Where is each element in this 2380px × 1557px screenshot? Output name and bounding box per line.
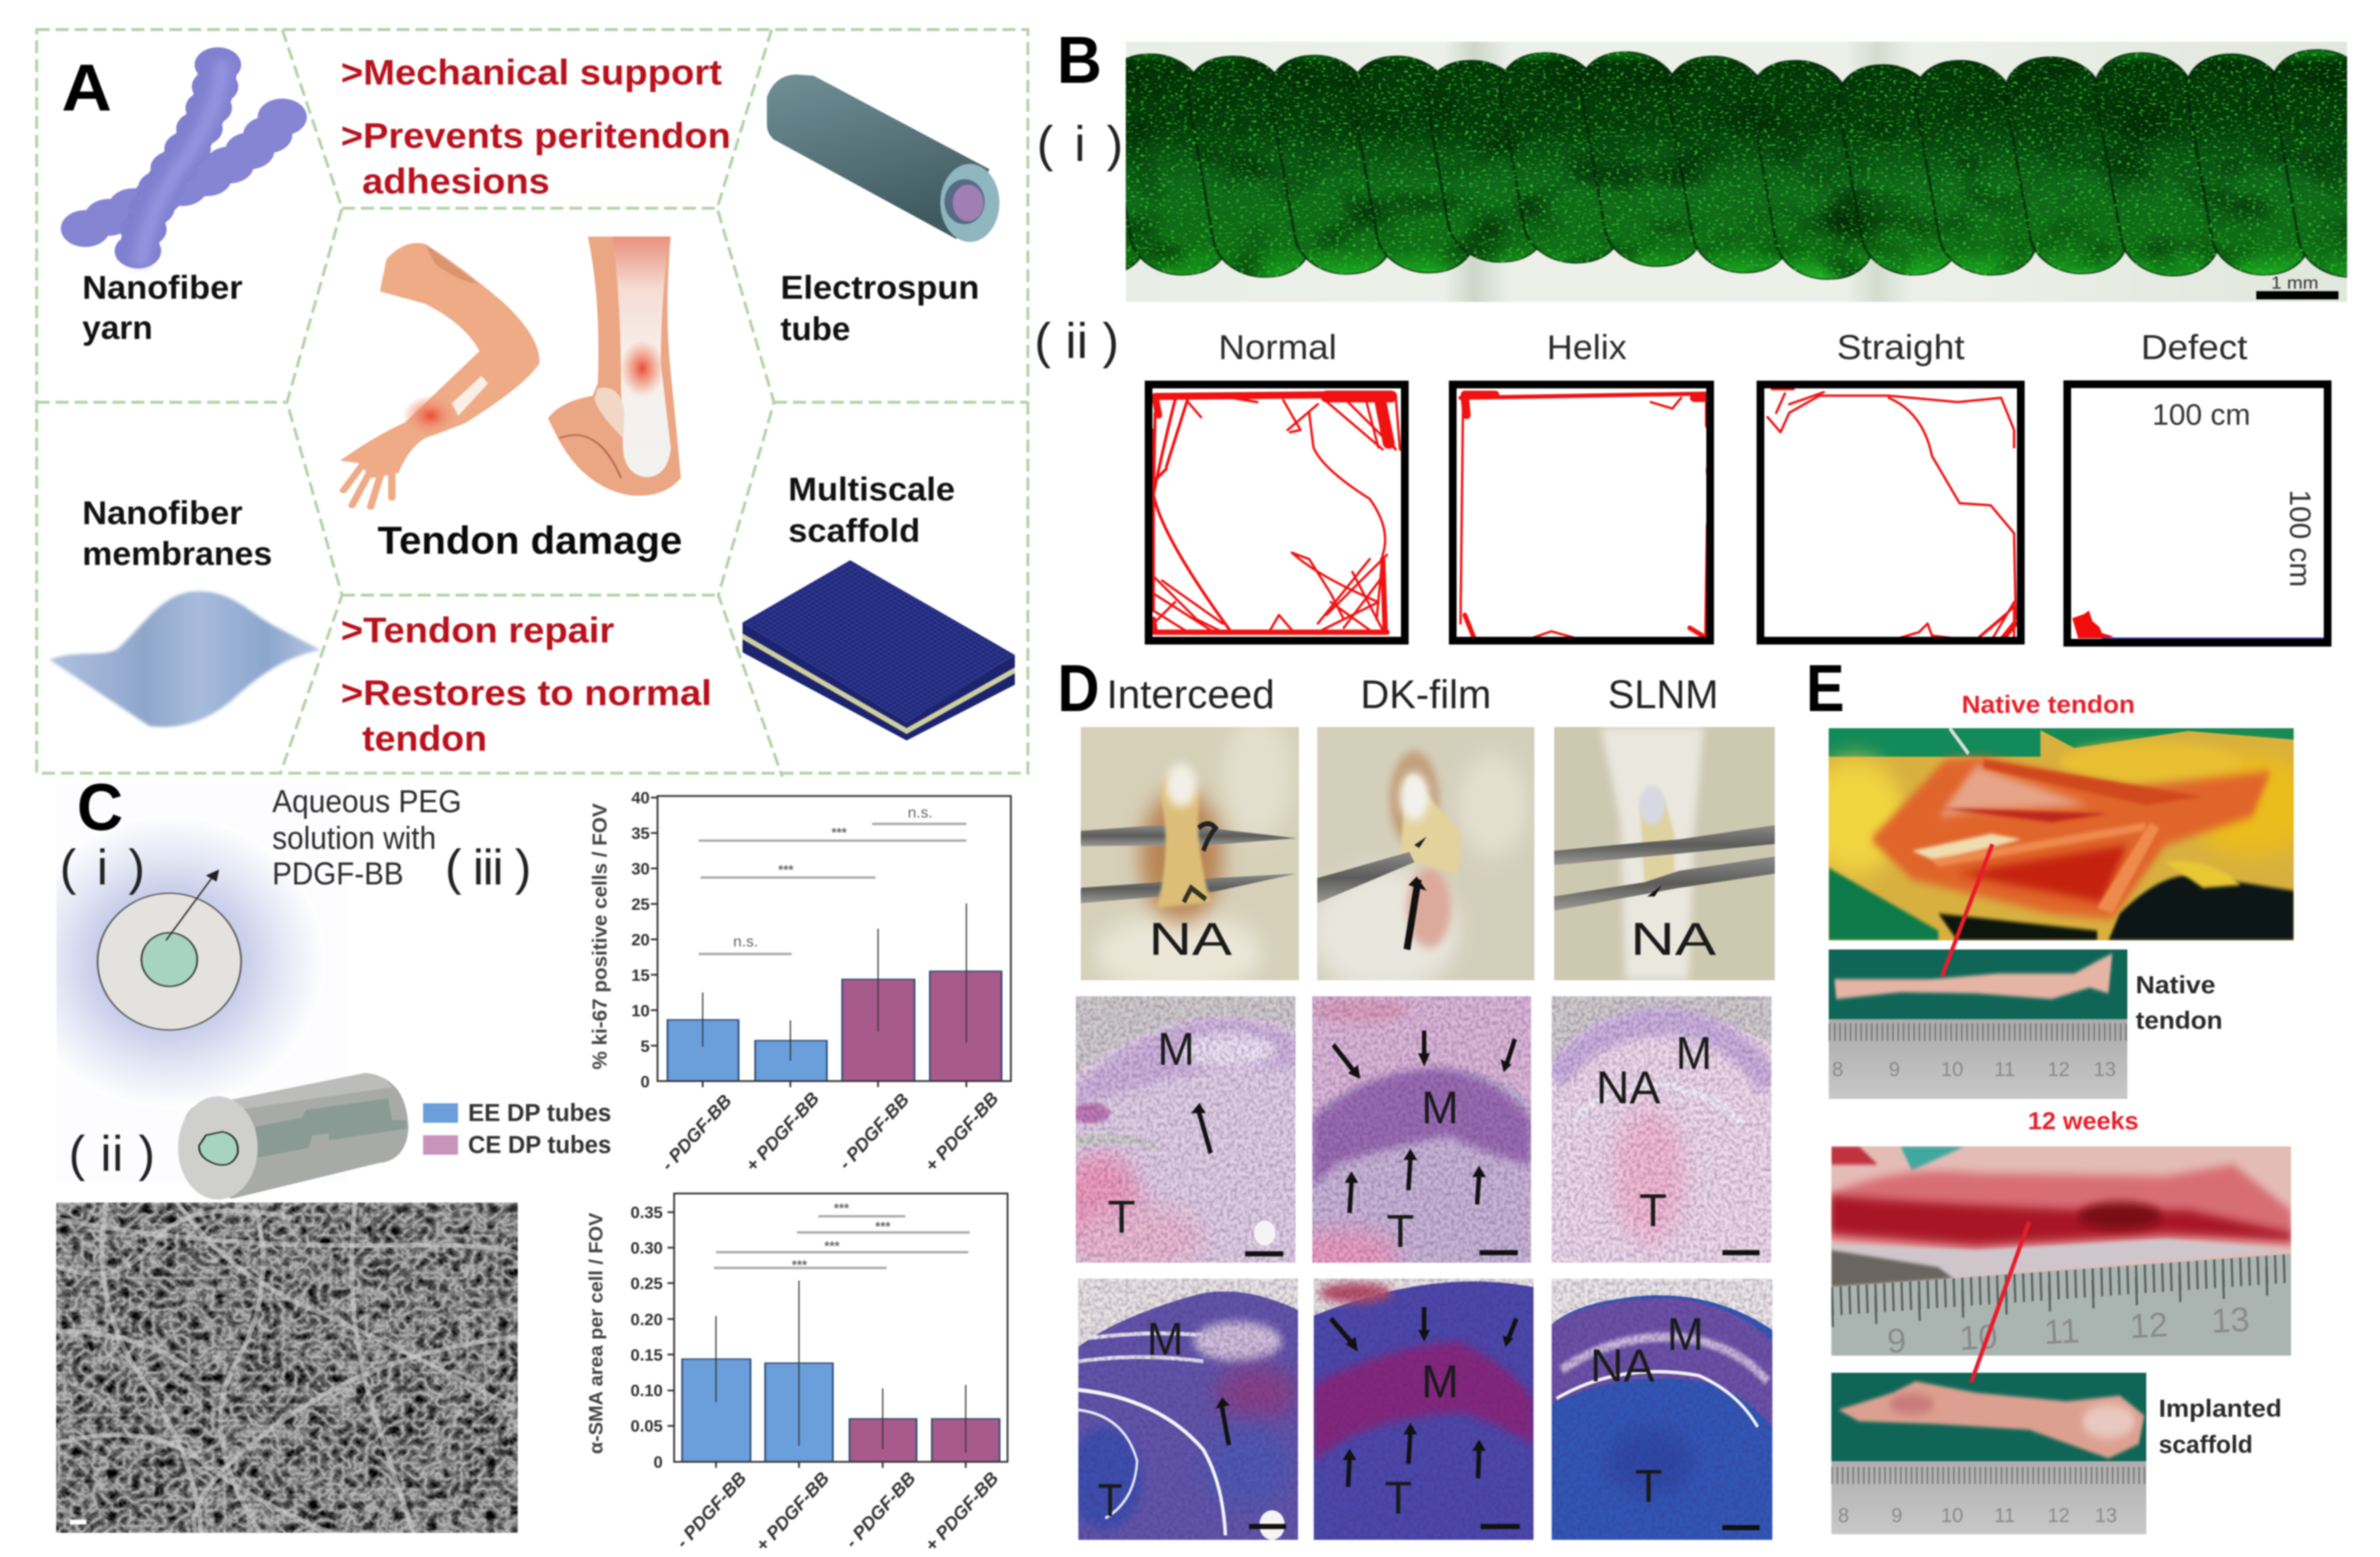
bar chart: alpha-SMA: 0.05 — [631, 1417, 663, 1435]
photo: native tendon in situ — [1806, 728, 2317, 941]
benefit list top: adhesions — [362, 161, 550, 201]
open field track: helix — [1453, 385, 1711, 641]
label Native tendon: tendon — [2136, 1006, 2223, 1034]
photo: excised implanted scaffold with ruler: 10 — [1941, 1504, 1963, 1527]
photo: excised implanted scaffold with ruler — [1831, 1373, 2146, 1534]
photo: excised native tendon with ruler: 8 — [1832, 1058, 1843, 1081]
benefit list bottom: >Tendon repair — [341, 610, 614, 650]
benefit list bottom: tendon — [362, 719, 487, 758]
bar chart: ki-67: + PDGF-BB — [741, 1088, 823, 1175]
column headings — [1107, 672, 1718, 717]
bar chart: alpha-SMA: 0.25 — [631, 1274, 663, 1293]
label: nanofiber membranes — [82, 494, 272, 572]
legend — [423, 1099, 611, 1158]
histology trichrome: DK-film: T — [1385, 1472, 1412, 1524]
open field track: straight — [1760, 385, 2021, 641]
histology HE: SLNM: T — [1639, 1184, 1667, 1236]
photo: implanted scaffold in situ with ruler: 11 — [2043, 1312, 2081, 1352]
panel E: native tendon and implanted scaffold — [1806, 651, 2317, 1534]
label: nanofiber membranes: Nanofiber — [82, 494, 243, 531]
label: electrospun tube — [781, 269, 979, 347]
label Aqueous PEG solution: solution with — [272, 821, 436, 856]
label: electrospun tube: tube — [781, 310, 850, 347]
group headings: Helix — [1547, 328, 1627, 367]
dashed hexagon layout — [37, 30, 1028, 777]
photo: Interceed gross: NA — [1149, 913, 1232, 965]
icon: injured arm — [340, 243, 540, 507]
label ( ii ): ( ii ) — [1034, 313, 1119, 369]
photo: implanted scaffold in situ with ruler: 9 — [1886, 1321, 1907, 1361]
label: multiscale scaffold — [788, 470, 955, 549]
bar chart: alpha-SMA: *** — [875, 1219, 891, 1234]
photo: excised native tendon with ruler: 11 — [1994, 1058, 2015, 1081]
histology HE: Interceed: M — [1157, 1023, 1195, 1075]
bar chart: alpha-SMA: 0.15 — [631, 1346, 663, 1364]
label: multiscale scaffold: scaffold — [788, 512, 920, 549]
histology trichrome: SLNM: T — [1635, 1460, 1662, 1512]
axis label 100 cm horizontal: 100 cm — [2152, 398, 2250, 431]
bar chart: ki-67: *** — [831, 825, 847, 840]
histology trichrome: Interceed: T — [1098, 1474, 1123, 1526]
fluorescence image of helical scaffold — [1017, 42, 2380, 302]
benefit list bottom — [341, 610, 712, 758]
bar chart: alpha-SMA: *** — [792, 1258, 807, 1272]
bar chart: alpha-SMA: + PDGF-BB — [921, 1468, 1002, 1555]
bar chart: alpha-SMA: 0.20 — [631, 1310, 663, 1329]
panel letter A: A — [62, 51, 112, 125]
photo: excised implanted scaffold with ruler: 12 — [2047, 1504, 2070, 1527]
bar chart: ki-67: % ki-67 positive cells / FOV — [589, 803, 611, 1070]
arrow: native tendon link — [1942, 844, 1992, 976]
panel D: adhesion photos and histology — [1057, 651, 1775, 1540]
histology HE: DK-film — [1292, 996, 1531, 1281]
label: nanofiber yarn: yarn — [82, 309, 153, 346]
benefit list top: >Prevents peritendon — [341, 116, 731, 156]
bar chart: alpha-SMA: - PDGF-BB — [672, 1468, 750, 1552]
arrow: implanted scaffold link — [1971, 1222, 2029, 1382]
bar chart: ki-67: 30 — [631, 860, 650, 878]
histology trichrome: Interceed: M — [1147, 1313, 1183, 1365]
bar chart: ki-67: 25 — [631, 895, 650, 913]
group headings: Defect — [2141, 328, 2247, 367]
bar chart: ki-67: 0 — [640, 1073, 650, 1091]
label: nanofiber yarn — [82, 269, 243, 346]
panel letter E: E — [1806, 651, 1844, 725]
label: tendon damage: Tendon damage — [378, 518, 682, 562]
column headings: SLNM — [1608, 672, 1718, 717]
label Aqueous PEG solution — [272, 784, 462, 891]
column headings: Interceed — [1107, 672, 1275, 717]
photo: excised native tendon with ruler: 12 — [2047, 1058, 2070, 1081]
bar chart: ki-67: 40 — [631, 789, 650, 807]
bar chart: ki-67: + PDGF-BB — [921, 1088, 1002, 1175]
panel letter B: B — [1057, 23, 1102, 97]
group headings — [1218, 328, 2247, 367]
bar chart: alpha-SMA: 0.35 — [631, 1203, 663, 1222]
label Implanted scaffold: scaffold — [2159, 1430, 2253, 1458]
SEM micrograph — [56, 1203, 528, 1533]
bar chart: ki-67: n.s. — [733, 932, 758, 950]
histology HE: DK-film: T — [1386, 1205, 1414, 1257]
open field track: normal — [1149, 385, 1405, 641]
photo: implanted scaffold in situ with ruler — [1831, 1146, 2291, 1361]
bar chart: alpha-SMA: - PDGF-BB — [841, 1468, 920, 1552]
panel letter C: C — [77, 770, 123, 844]
photo: SLNM gross — [1554, 727, 1775, 980]
label Native tendon: Native — [2136, 971, 2215, 999]
histology HE: DK-film: M — [1421, 1081, 1459, 1133]
label Aqueous PEG solution: Aqueous PEG — [272, 784, 462, 819]
panel A: tendon scaffold hexagon diagram — [37, 30, 1028, 777]
diffusion glow and cross section — [13, 783, 349, 1183]
histology trichrome: Interceed — [1069, 1278, 1299, 1540]
label Aqueous PEG solution: PDGF-BB — [272, 856, 404, 891]
icon: nanofiber yarn — [75, 64, 282, 261]
column headings: DK-film — [1360, 672, 1491, 717]
bar chart: ki-67: 10 — [631, 1002, 650, 1020]
photo: implanted scaffold in situ with ruler: 13 — [2210, 1300, 2250, 1340]
photo: excised native tendon with ruler: 9 — [1889, 1058, 1900, 1081]
histology HE: SLNM — [1552, 996, 1772, 1262]
scale bar label: 1 mm — [2271, 273, 2318, 293]
photo: excised native tendon with ruler: 10 — [1941, 1058, 1963, 1081]
legend: EE DP tubes — [468, 1099, 611, 1126]
photo: excised implanted scaffold with ruler: 13 — [2095, 1504, 2117, 1527]
histology trichrome: SLNM: NA — [1590, 1339, 1655, 1391]
label: multiscale scaffold: Multiscale — [788, 470, 955, 508]
photo: excised implanted scaffold with ruler: 8 — [1838, 1504, 1849, 1527]
benefit list top: >Mechanical support — [341, 53, 722, 92]
heading 12 weeks: 12 weeks — [2028, 1107, 2139, 1135]
photo: excised native tendon with ruler: 13 — [2094, 1058, 2116, 1081]
bar chart: alpha-SMA: 0 — [653, 1453, 663, 1471]
bar chart: ki-67: *** — [778, 863, 794, 877]
label: nanofiber membranes: membranes — [82, 535, 272, 572]
bar chart: alpha-SMA: 0.30 — [631, 1239, 663, 1257]
bar chart: ki-67: 35 — [631, 824, 650, 842]
photo: Interceed gross — [1081, 714, 1299, 993]
bar chart: alpha-SMA: *** — [824, 1239, 840, 1254]
panel B: helix scaffold and open field — [1017, 23, 2380, 642]
bar chart: alpha-SMA: *** — [834, 1201, 849, 1216]
bar chart: ki-67: - PDGF-BB — [657, 1090, 736, 1175]
label Implanted scaffold: Implanted — [2159, 1394, 2282, 1422]
photo: excised implanted scaffold with ruler: 9 — [1891, 1504, 1902, 1527]
histology HE: Interceed: T — [1108, 1191, 1136, 1243]
histology HE: Interceed — [1059, 996, 1295, 1273]
bar chart: ki-67 — [589, 789, 1011, 1175]
bar chart: ki-67: - PDGF-BB — [834, 1089, 913, 1174]
icon: electrospun tube — [767, 75, 999, 242]
icon: nanofiber membrane — [50, 592, 320, 727]
label ( i ): ( i ) — [60, 839, 145, 895]
photo: implanted scaffold in situ with ruler: 10 — [1958, 1317, 1998, 1358]
label Implanted scaffold — [2159, 1394, 2282, 1458]
bar chart: alpha-SMA: α-SMA area per cell / FOV — [585, 1212, 607, 1454]
open field track: defect — [2068, 385, 2328, 642]
label: electrospun tube: Electrospun — [781, 269, 979, 306]
bar chart: ki-67: 5 — [640, 1037, 650, 1055]
panel C: drug release tubes and charts — [13, 770, 1011, 1555]
label: nanofiber yarn: Nanofiber — [82, 269, 243, 306]
bar chart: alpha-SMA — [585, 1194, 1008, 1555]
label ( i ): ( i ) — [1037, 116, 1123, 172]
bar chart: ki-67: 20 — [631, 931, 650, 949]
photo: excised implanted scaffold with ruler: 11 — [1994, 1504, 2015, 1527]
photo: DK-film gross — [1311, 727, 1534, 993]
icon: injured ankle — [548, 237, 681, 496]
histology trichrome: SLNM: M — [1667, 1308, 1704, 1360]
benefit list top — [341, 53, 731, 201]
bar chart: ki-67: n.s. — [908, 803, 933, 821]
photo: excised native tendon with ruler — [1828, 949, 2127, 1099]
photo: implanted scaffold in situ with ruler: 12 — [2129, 1306, 2169, 1346]
bar chart: ki-67: 15 — [631, 966, 650, 984]
label ( ii ): ( ii ) — [69, 1126, 155, 1181]
icon: multiscale scaffold — [743, 560, 1015, 741]
label Native tendon — [2136, 971, 2223, 1034]
histology trichrome: SLNM — [1552, 1278, 1772, 1540]
histology HE: SLNM: NA — [1596, 1061, 1660, 1113]
histology trichrome: DK-film — [1314, 1278, 1533, 1540]
3D tube illustration — [178, 1073, 408, 1200]
histology HE: SLNM: M — [1676, 1027, 1712, 1079]
legend: CE DP tubes — [468, 1130, 611, 1158]
bar chart: alpha-SMA: + PDGF-BB — [752, 1468, 833, 1555]
heading Native tendon: Native tendon — [1962, 690, 2135, 718]
benefit list bottom: >Restores to normal — [341, 673, 712, 713]
group headings: Normal — [1218, 328, 1337, 367]
panel letter D: D — [1057, 651, 1099, 725]
label ( iii ): ( iii ) — [445, 839, 531, 895]
histology trichrome: DK-film: M — [1421, 1355, 1459, 1407]
axis label 100 cm vertical: 100 cm — [2284, 489, 2317, 587]
photo: SLNM gross: NA — [1630, 913, 1716, 965]
bar chart: alpha-SMA: 0.10 — [631, 1381, 663, 1400]
group headings: Straight — [1837, 328, 1965, 367]
